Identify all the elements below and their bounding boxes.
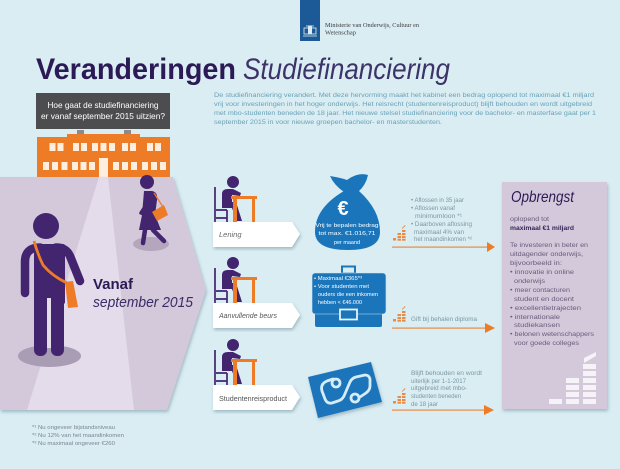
panel: purple hexagon with students bbox=[0, 175, 206, 410]
amount bbox=[510, 216, 574, 232]
icon: money bag: tot max. €1.016,71 bbox=[318, 231, 376, 237]
icon: money bag bbox=[315, 174, 380, 250]
arrow 1 with growth icon and text: minimumloon *¹ bbox=[415, 213, 462, 220]
footnotes: *² Nu 12% van het maandinkomen bbox=[32, 433, 124, 439]
light beam from door bbox=[27, 177, 134, 410]
icon: orange bars bbox=[393, 388, 406, 404]
icon: travel card bbox=[308, 362, 382, 418]
icon: male student bbox=[18, 213, 81, 367]
investment list: voor goede colleges bbox=[514, 340, 580, 347]
title bbox=[36, 53, 450, 86]
investment list: • innovatie in online bbox=[510, 269, 574, 276]
ministry logo and name: Wetenschap bbox=[325, 30, 356, 36]
icon: orange bars bbox=[393, 306, 406, 322]
investment list: onderwijs bbox=[514, 278, 546, 285]
amount: oplopend tot bbox=[510, 216, 549, 223]
arrow 3 with growth icon and text: studenten beneden bbox=[411, 393, 462, 400]
text: vanaf september 2015: september 2015 bbox=[93, 294, 194, 311]
heading: Opbrengst bbox=[511, 189, 574, 206]
investment list: studiekansen bbox=[514, 322, 560, 329]
investment list: bijvoorbeeld in: bbox=[510, 260, 562, 267]
arrow 2 with growth icon and text: Gift bij behalen diploma bbox=[411, 316, 478, 323]
intro text block: vrij voor investeringen in het hoger onderwijs. Het reisrecht (studentenreisproduct) blijft behouden en wordt uitgebreid bbox=[214, 101, 592, 108]
title: Veranderingen bbox=[36, 53, 236, 86]
arrow 1 with growth icon and text: • Daarboven aflossing bbox=[411, 221, 473, 228]
arrow 1 with growth icon and text: • Aflossen in 35 jaar bbox=[411, 197, 464, 204]
billboard: question: Hoe gaat de studiefinanciering bbox=[48, 100, 159, 110]
investment list: • belonen wetenschappers bbox=[510, 331, 595, 338]
intro text block: september 2015 in voor nieuwe groepen bachelor- en masterstudenten. bbox=[214, 119, 442, 126]
icon: briefcase with text bbox=[312, 266, 386, 327]
icon: student at desk bbox=[215, 176, 257, 222]
ministry logo and name bbox=[300, 0, 419, 41]
investment list: • meer contacturen bbox=[510, 287, 570, 294]
arrow 1 with growth icon and text bbox=[392, 197, 495, 252]
intro text block bbox=[214, 92, 596, 126]
footnotes: *¹ Nu ongeveer bijstandsniveau bbox=[32, 425, 115, 431]
icon: briefcase with text: ouders die een inkomen bbox=[318, 292, 378, 298]
investment list: uitdagender onderwijs, bbox=[510, 251, 583, 258]
icon: white rising bars bbox=[549, 352, 596, 404]
label tag: Aanvullende beurs bbox=[218, 311, 277, 320]
icon: money bag: € bbox=[337, 198, 349, 220]
intro text block: met mbo-studenten beneden de 18 jaar. Het nieuwe stelsel studiefinanciering voor de bachelor- en masterfase gaat per 1 bbox=[214, 110, 596, 117]
text: vanaf september 2015: Vanaf bbox=[93, 276, 134, 293]
panel: opbrengst bbox=[502, 182, 607, 409]
title: Studiefinanciering bbox=[243, 53, 450, 86]
billboard: question: er vanaf september 2015 uitzien? bbox=[41, 111, 165, 121]
arrow 2 with growth icon and text bbox=[392, 306, 495, 333]
icon: coat of arms bbox=[303, 26, 317, 36]
investment list: Te investeren in beter en bbox=[510, 242, 588, 249]
footnotes: *³ Nu maximaal ongeveer €260 bbox=[32, 441, 115, 447]
icon: student at desk bbox=[215, 257, 257, 303]
icon: briefcase with text: hebben < €46.000 bbox=[318, 300, 363, 306]
row: lening bbox=[213, 176, 300, 247]
billboard: question bbox=[36, 93, 170, 129]
label tag: Lening bbox=[219, 230, 242, 239]
row: studentenreisproduct bbox=[213, 339, 300, 410]
icon: briefcase with text: • Voor studenten met bbox=[314, 284, 369, 290]
arrow 3 with growth icon and text: uiterlijk per 1-1-2017 bbox=[411, 378, 467, 385]
icon: female student bbox=[133, 175, 169, 251]
footnotes bbox=[32, 425, 124, 447]
investment list: • internationale bbox=[510, 314, 560, 321]
arrow 3 with growth icon and text: uitgebreid met mbo- bbox=[411, 385, 467, 392]
arrow 1 with growth icon and text: • Aflossen vanaf bbox=[411, 205, 455, 212]
icon: money bag: per maand bbox=[334, 240, 360, 246]
intro text block: De studiefinanciering verandert. Met deze hervorming maakt het kabinet een bedrag oplopend tot maximaal €1 miljard bbox=[214, 92, 594, 99]
arrow 3 with growth icon and text bbox=[392, 370, 494, 415]
investment list: student en docent bbox=[514, 296, 574, 303]
amount: maximaal €1 miljard bbox=[510, 225, 574, 232]
investment list bbox=[510, 242, 595, 347]
icon: money bag: Vrij te bepalen bedrag bbox=[316, 223, 378, 229]
icon: student at desk bbox=[215, 339, 257, 385]
arrow 1 with growth icon and text: maximaal 4% van bbox=[414, 229, 465, 236]
row: aanvullende beurs bbox=[213, 257, 300, 328]
investment list: • excellentietrajecten bbox=[510, 305, 581, 312]
ministry logo and name: Ministerie van Onderwijs, Cultuur en bbox=[325, 23, 419, 29]
text: vanaf september 2015 bbox=[93, 276, 194, 311]
icon: orange school building bbox=[37, 130, 170, 177]
arrow 3 with growth icon and text: Blijft behouden en wordt bbox=[411, 370, 482, 377]
icon: briefcase with text: • Maximaal €365*³ bbox=[314, 276, 362, 282]
arrow 3 with growth icon and text: de 18 jaar bbox=[411, 401, 438, 408]
icon: orange bars bbox=[393, 225, 406, 241]
arrow 1 with growth icon and text: het maandinkomen *² bbox=[414, 236, 472, 243]
label tag: Studentenreisproduct bbox=[219, 394, 288, 403]
